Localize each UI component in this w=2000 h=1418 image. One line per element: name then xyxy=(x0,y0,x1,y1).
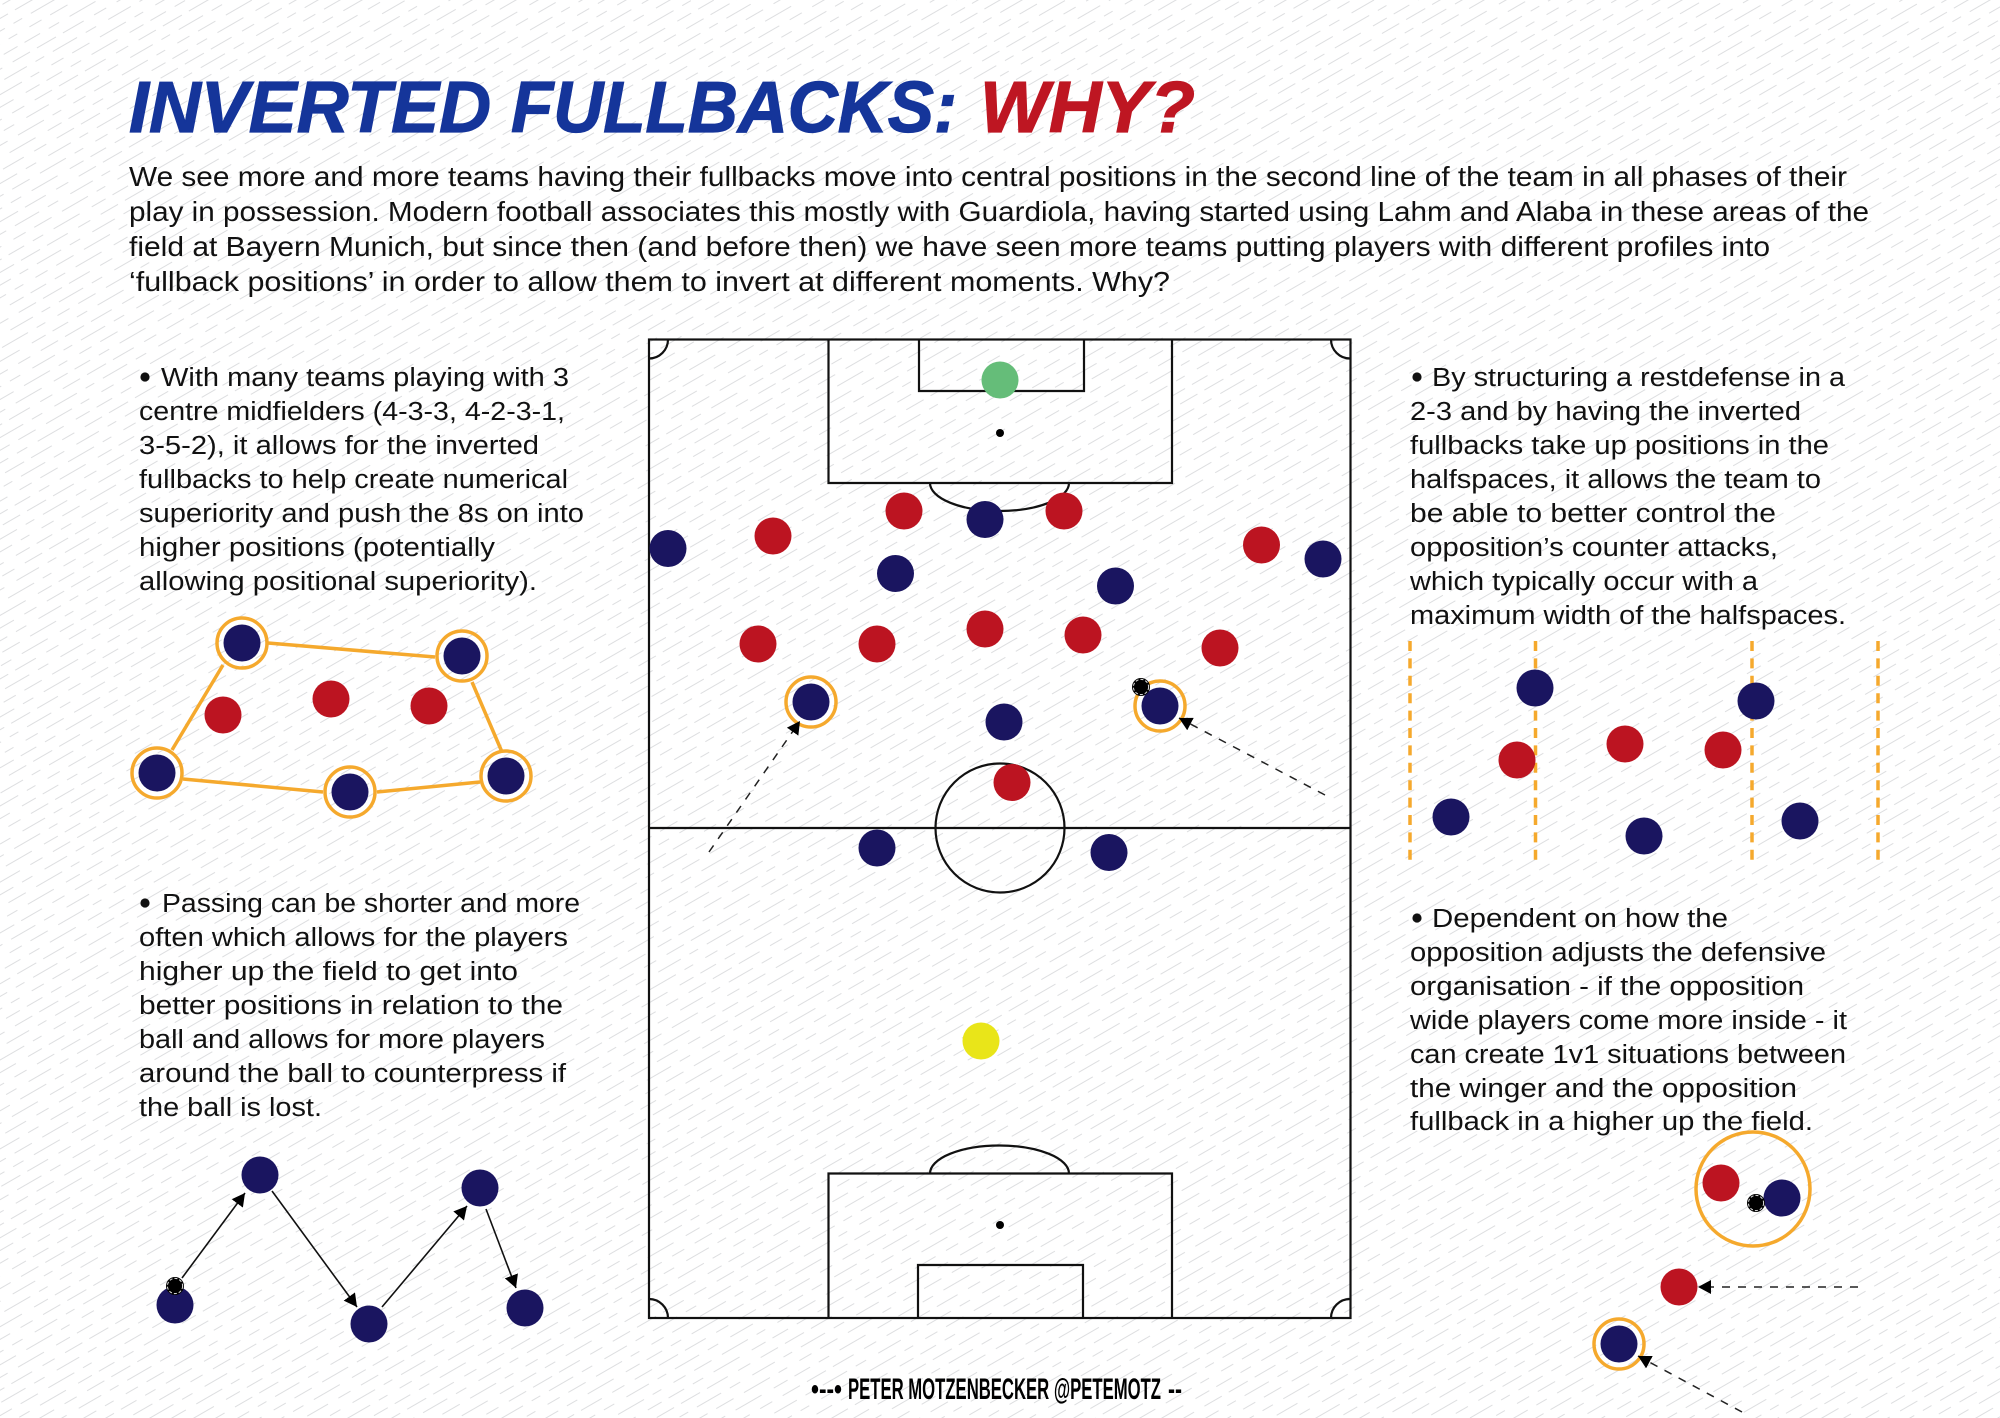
inverted fullback rings xyxy=(786,677,1185,731)
text block: passing xyxy=(139,890,580,1122)
diagram: passing chain xyxy=(156,1156,544,1342)
credit line: -- xyxy=(1168,1373,1182,1406)
text block: rest defense: 2-3 and by having the inverted xyxy=(1410,398,1801,426)
text block: rest defense: which typically occur with a xyxy=(1409,568,1759,596)
intro text block: We see more and more teams having their fullbacks move into central positions in the second line of the team in all phases of their xyxy=(129,161,1847,192)
text block: passing: Passing can be shorter and more xyxy=(162,890,580,918)
text block: opposition adjustment: can create 1v1 situations between xyxy=(1410,1041,1846,1069)
text block: rest defense: opposition’s counter attacks, xyxy=(1410,534,1778,562)
diagram: 1v1 situation xyxy=(1594,1132,1858,1412)
arrow: right fullback run xyxy=(1179,718,1325,795)
diagram: rest defense halfspaces xyxy=(1410,641,1878,867)
credit line: PETER MOTZENBECKER @PETEMOTZ xyxy=(848,1373,1161,1406)
text block: rest defense: By structuring a restdefense in a xyxy=(1432,364,1846,392)
navy team players xyxy=(650,501,1342,871)
text block: opposition adjustment: Dependent on how the xyxy=(1432,905,1728,933)
text block: opposition adjustment: opposition adjusts the defensive xyxy=(1410,939,1826,967)
text block: numerical superiority xyxy=(139,364,584,596)
text block: numerical superiority: superiority and push the 8s on into xyxy=(139,500,584,528)
title xyxy=(129,68,1195,148)
text block: opposition adjustment: organisation - if the opposition xyxy=(1410,973,1804,1001)
text block: rest defense: fullbacks take up positions in the xyxy=(1410,432,1829,460)
text block: numerical superiority: fullbacks to help create numerical xyxy=(139,466,568,494)
intro text block: field at Bayern Munich, but since then (and before then) we have seen more teams putting players with different profiles into xyxy=(129,231,1770,262)
red team players xyxy=(740,492,1280,801)
credit line: •--• xyxy=(811,1373,842,1406)
text block: numerical superiority: With many teams playing with 3 xyxy=(161,364,569,392)
text block: passing: around the ball to counterpress if xyxy=(139,1060,567,1088)
text block: opposition adjustment: the winger and the opposition xyxy=(1410,1075,1797,1103)
title: INVERTED xyxy=(129,68,491,148)
title: FULLBACKS: xyxy=(511,68,957,148)
text block: opposition adjustment xyxy=(1409,905,1847,1136)
intro text block xyxy=(129,161,1869,297)
yellow player xyxy=(962,1022,1000,1060)
credit line xyxy=(811,1373,1182,1406)
text block: passing: the ball is lost. xyxy=(139,1094,322,1122)
text block: numerical superiority: higher positions (potentially xyxy=(139,534,495,562)
football xyxy=(1132,678,1150,696)
text block: rest defense: halfspaces, it allows the team to xyxy=(1410,466,1821,494)
text block: numerical superiority: allowing positional superiority). xyxy=(139,568,537,596)
text block: passing: better positions in relation to the xyxy=(139,992,563,1020)
intro text block: play in possession. Modern football associates this mostly with Guardiola, having started using Lahm and Alaba in these areas of the xyxy=(129,196,1869,227)
arrow: left fullback run xyxy=(709,721,800,852)
text block: passing: higher up the field to get into xyxy=(139,958,518,986)
text block: numerical superiority: centre midfielders (4-3-3, 4-2-3-1, xyxy=(139,398,565,426)
text block: opposition adjustment: wide players come more inside - it xyxy=(1409,1007,1847,1035)
text block: passing: often which allows for the players xyxy=(139,924,568,952)
text block: passing: ball and allows for more players xyxy=(139,1026,545,1054)
text block: rest defense xyxy=(1409,364,1846,630)
diagram: numerical superiority shape xyxy=(132,618,531,817)
text block: rest defense: be able to better control the xyxy=(1410,500,1776,528)
goalkeeper xyxy=(982,362,1018,398)
intro text block: ‘fullback positions’ in order to allow them to invert at different moments. Why? xyxy=(129,266,1170,297)
text block: numerical superiority: 3-5-2), it allows for the inverted xyxy=(139,432,539,460)
text block: rest defense: maximum width of the halfspaces. xyxy=(1410,602,1846,630)
text block: opposition adjustment: fullback in a higher up the field. xyxy=(1410,1108,1813,1136)
title: WHY? xyxy=(980,68,1195,148)
pitch xyxy=(649,340,1350,1318)
